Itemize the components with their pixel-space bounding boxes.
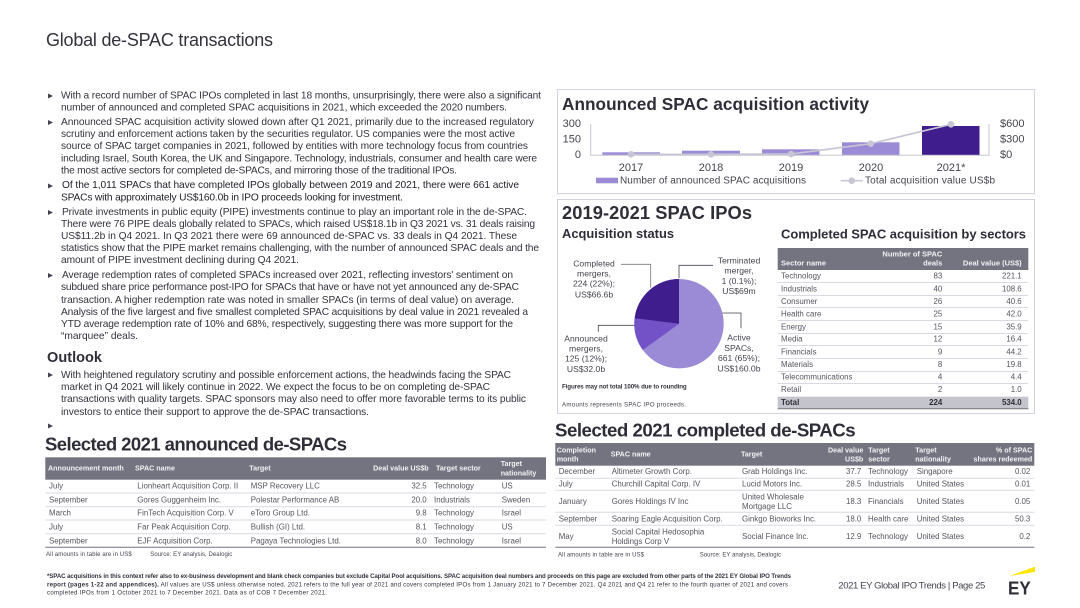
pie label: announced mergers: Announced — [564, 334, 608, 344]
table header: shares redeemed — [974, 456, 1032, 464]
table rows: 1.0 — [1011, 385, 1022, 394]
text block: key findings: US$11.2b in Q4 2021. In Q3 2021 there were 69 announced de-SPAC vs. 33 deals in Q4 2021. These — [61, 231, 517, 242]
text block: key findings: transaction. A higher redemption rate was noted in smaller SPACs (in terms of deal value) on average. — [61, 295, 514, 306]
table rows: Technology — [434, 509, 474, 518]
table rows: Israel — [502, 536, 521, 545]
table total row: Total — [781, 398, 799, 407]
pie chart: acquisition status — [634, 279, 724, 368]
table header: nationality — [501, 470, 536, 478]
footnote: completed IPOs from 1 October 2021 to 7 December 2021. Data as of COB 7 December 2021. — [47, 590, 327, 596]
table rows: Holdings Corp V — [612, 537, 670, 546]
table rows: 25 — [934, 310, 943, 319]
table rows: EJF Acquisition Corp. — [137, 536, 213, 545]
text block: key findings: Announced SPAC acquisition activity slowed down after Q1 2021, primarily due to the increased regulatory — [61, 117, 535, 128]
left axis labels: 300 — [563, 118, 581, 130]
table header: % of SPAC — [996, 446, 1032, 454]
table rows: Gores Holdings IV Inc — [612, 497, 689, 506]
table rows: Gores Guggenheim Inc. — [137, 495, 221, 504]
left axis labels: 0 — [575, 149, 581, 161]
table rows: January — [559, 497, 587, 506]
right axis labels: $600 — [1000, 118, 1024, 130]
table rows: 8 — [938, 360, 943, 369]
table rows: 108.6 — [1002, 284, 1022, 293]
footnote: report (pages 1-22 and appendices). All values are US$ unless otherwise noted. 2021 refers to the full year of 2021 and covers completed IPOs from 1 January 2021 to 7 December 2021. Q4 2021 and Q4 21 refer to the fourth quarter of 2021 and covers — [47, 581, 788, 588]
legend: Number of announced SPAC acquisitions — [620, 176, 806, 186]
table rows: Health care — [781, 310, 822, 319]
heading: Outlook: Outlook — [47, 350, 103, 366]
table header: US$b — [845, 456, 864, 464]
panel: 2019-2021 SPAC IPOs — [558, 200, 1034, 414]
page footer: 2021 EY Global IPO Trends | Page 25 — [838, 580, 985, 591]
text block: key findings: YTD average redemption rate of 10% and 68%, respectively, suggesting there was more support for the — [61, 319, 513, 330]
pie label: active SPACs: 661 (65%); — [718, 353, 760, 363]
table rows: 4 — [938, 372, 943, 381]
table header: Target sector — [436, 465, 481, 473]
table rows: 19.8 — [1006, 360, 1022, 369]
table header: Deal value US$b — [373, 465, 429, 473]
heading: completed de-SPACs: Selected 2021 completed de-SPACs — [555, 420, 856, 441]
table rows: Ginkgo Bioworks Inc. — [742, 515, 816, 524]
table header: SPAC name — [611, 451, 651, 459]
text block: outlook: transactions with quality targets. SPAC sponsors may also need to offer more favorable terms to its public — [61, 394, 526, 405]
table rows: 44.2 — [1006, 347, 1022, 356]
pie label: terminated merger: 1 (0.1%); — [722, 276, 756, 286]
table rows — [555, 467, 1034, 547]
text block: key findings: Average redemption rates of completed SPACs increased over 2021, reflecting investors' sentiment on — [62, 270, 513, 281]
pie label: completed mergers: US$66.6b — [575, 289, 613, 299]
pie label: active SPACs: SPACs, — [724, 343, 754, 353]
table header — [778, 248, 1028, 270]
table rows: July — [49, 481, 63, 490]
table rows: Media — [781, 335, 803, 344]
table rows: Technology — [434, 481, 474, 490]
table rows: 0.05 — [1015, 497, 1031, 506]
heading: announced de-SPACs: Selected 2021 announced de-SPACs — [45, 434, 347, 455]
text block: key findings: Private investments in public equity (PIPE) investments continue to play an important role in the de-SPAC. — [62, 207, 527, 218]
table rows: Israel — [502, 509, 521, 518]
table rows: Churchill Capital Corp. IV — [612, 480, 701, 489]
text block: key findings: Analysis of the five largest and five smallest completed SPAC acquisitions by deal value in 2021 revealed a — [61, 307, 528, 318]
table rows: Pagaya Technologies Ltd. — [251, 536, 341, 545]
category labels: 2021* — [937, 162, 966, 174]
table header: Target — [868, 446, 890, 454]
table rows: 2 — [938, 385, 942, 394]
table rows: 18.3 — [846, 497, 862, 506]
table rows: December — [559, 467, 595, 476]
table rows: 50.3 — [1015, 515, 1031, 524]
table rows: Technology — [868, 467, 908, 476]
table rows: 8.0 — [416, 536, 427, 545]
table rows: Industrials — [434, 495, 470, 504]
pie label: completed mergers — [573, 259, 615, 299]
table rows: Social Capital Hedosophia — [612, 527, 705, 536]
text block: key findings — [48, 90, 541, 342]
heading: announced SPAC acquisition activity: Announced SPAC acquisition activity — [562, 94, 869, 114]
text block: key findings: amount of PIPE investment declining during Q4 2021. — [61, 255, 299, 266]
table rows: Technology — [781, 272, 821, 281]
table rows: FinTech Acquisition Corp. V — [137, 509, 235, 518]
table total row: 534.0 — [1002, 398, 1022, 407]
pie label: announced mergers — [564, 334, 608, 374]
table rows: Far Peak Acquisition Corp. — [137, 522, 231, 531]
table rows: Lucid Motors Inc. — [742, 480, 802, 489]
table rows: Bullish (GI) Ltd. — [251, 522, 305, 531]
table rows: eToro Group Ltd. — [251, 509, 310, 518]
table header: Number of SPAC — [882, 250, 943, 259]
pie label: terminated merger — [718, 256, 760, 296]
table rows: 28.5 — [846, 480, 862, 489]
table notes: All amounts in table are in US$ — [558, 553, 645, 559]
table rows: Soaring Eagle Acquisition Corp. — [612, 515, 723, 524]
table rows: Polestar Performance AB — [251, 495, 339, 504]
table rows: 4.4 — [1011, 372, 1022, 381]
table rows: May — [559, 532, 574, 541]
subheading: acquisition status: Acquisition status — [562, 226, 674, 241]
pie label: active SPACs: Active — [727, 333, 751, 343]
table rows: July — [49, 522, 63, 531]
table rows: United States — [917, 515, 964, 524]
left axis labels: 150 — [563, 134, 581, 146]
table rows: 9.8 — [416, 509, 427, 518]
table: selected 2021 announced de-SPACs — [45, 434, 546, 558]
table notes — [558, 553, 781, 559]
table rows: 0.2 — [1019, 532, 1030, 541]
table rows: Financials — [868, 497, 904, 506]
text block: key findings: number of announced and completed SPAC acquisitions in 2021, which exceeded the 2020 numbers. — [61, 102, 507, 114]
table rows: 37.7 — [846, 467, 861, 476]
footnote — [47, 573, 792, 596]
table header: nationality — [915, 456, 951, 464]
table rows: 20.0 — [411, 495, 427, 504]
text block: key findings: With a record number of SPAC IPOs completed in last 18 months, unsurprisingly, there were also a significant — [61, 90, 541, 102]
table header: sector — [868, 456, 890, 464]
text block: key findings: There were 76 PIPE deals globally related to SPACs, which raised US$18.1b in Q3 2021 vs. 31 deals raising — [61, 219, 535, 230]
text block: outlook — [48, 370, 526, 428]
text block: key findings: “marquee” deals. — [61, 331, 138, 342]
text block: key findings: statistics show that the PIPE market remains challenging, with the number of announced SPAC deals and the — [61, 243, 539, 254]
table rows — [778, 272, 1028, 394]
title: Global de-SPAC transactions — [46, 30, 273, 50]
table notes: Source: EY analysis, Dealogic — [150, 552, 232, 558]
pie label: terminated merger: US$69m — [722, 286, 756, 296]
table rows: Technology — [434, 536, 474, 545]
table total row: 224 — [929, 398, 943, 407]
pie label: terminated merger: Terminated — [718, 256, 760, 266]
table rows: 16.4 — [1006, 335, 1022, 344]
table rows: US — [502, 522, 513, 531]
table rows: Lionheart Acquisition Corp. II — [137, 481, 238, 490]
table rows: Sweden — [502, 495, 530, 504]
pie label: completed mergers: mergers, — [577, 269, 611, 279]
table rows: 40.6 — [1006, 297, 1022, 306]
right axis labels: $300 — [1000, 134, 1024, 146]
table rows: United Wholesale — [742, 493, 804, 502]
pie label: terminated merger: merger, — [724, 266, 754, 276]
table rows: July — [559, 480, 573, 489]
table rows: Energy — [781, 322, 806, 331]
heading: sectors table: Completed SPAC acquisition by sectors — [781, 226, 1026, 241]
table header: Sector name — [781, 259, 826, 268]
table: selected 2021 completed de-SPACs — [555, 420, 1034, 559]
note: amounts: Amounts represents SPAC IPO proceeds. — [562, 402, 686, 409]
table rows: 15 — [934, 322, 943, 331]
legend — [596, 176, 995, 186]
table header: Target — [249, 465, 271, 473]
table rows: US — [502, 481, 513, 490]
table notes — [46, 552, 232, 558]
table rows: Grab Holdings Inc. — [742, 467, 807, 476]
table rows: Technology — [868, 532, 908, 541]
line chart: total acquisition value — [628, 121, 954, 158]
table header — [45, 457, 546, 480]
bar chart: number of acquisitions — [591, 124, 989, 155]
pie leader lines — [598, 264, 741, 332]
table rows: 0.02 — [1015, 467, 1030, 476]
text block: key findings: Of the 1,011 SPACs that have completed IPOs globally between 2019 and 2021, there were 661 active — [62, 180, 519, 191]
text block: outlook: market in Q4 2021 will likely continue in 2022. We expect the focus to be on completing de-SPAC — [61, 382, 490, 393]
table rows: September — [559, 515, 598, 524]
table rows: United States — [917, 497, 964, 506]
table header: Deal value — [828, 446, 863, 454]
table rows: Technology — [434, 522, 474, 531]
legend: Total acquisition value US$b — [865, 176, 995, 186]
footnote: *SPAC acquisitions in this context refer also to ex-business development and blank check companies but exclude Capital Pool acquisitions. SPAC acquisition deal numbers and proceeds on this page are excluded from other parts of the 2021 EY Global IPO Trends — [47, 573, 792, 580]
pie label: completed mergers: 224 (22%); — [573, 279, 615, 289]
table rows: 26 — [934, 297, 943, 306]
left axis labels — [563, 118, 581, 161]
table rows: Industrials — [868, 480, 904, 489]
table rows: Singapore — [917, 467, 953, 476]
table rows: Altimeter Growth Corp. — [612, 467, 692, 476]
panel: announced SPAC acquisition activity — [558, 90, 1034, 194]
text block: key findings: the most active sectors for completed de-SPACs, and mirroring those of the traditional IPOs. — [61, 166, 457, 176]
text block: key findings: subdued share price performance post-IPO for SPACs that have or have not yet announced any de-SPAC — [61, 282, 519, 293]
table rows: 35.9 — [1006, 322, 1022, 331]
pie label: completed mergers: Completed — [573, 259, 615, 269]
table header: Completion — [557, 446, 596, 454]
table rows: MSP Recovery LLC — [251, 481, 320, 490]
table rows: 12.9 — [846, 532, 862, 541]
table notes: Source: EY analysis, Dealogic — [700, 553, 781, 559]
table header: Announcement month — [48, 465, 124, 473]
table header: Target — [741, 451, 763, 459]
table rows: Industrials — [781, 284, 817, 293]
table rows: 42.0 — [1006, 310, 1022, 319]
pie label: active SPACs: US$160.0b — [717, 364, 761, 374]
table rows: 12 — [934, 335, 942, 344]
table rows: Telecommunications — [781, 372, 853, 381]
table rows: 0.01 — [1015, 480, 1030, 489]
table header: month — [557, 456, 579, 464]
pie label: announced mergers: US$32.0b — [567, 364, 605, 374]
table rows: 9 — [938, 347, 943, 356]
table header: Target — [915, 446, 937, 454]
table rows: March — [49, 509, 71, 518]
text block: key findings: including Israel, South Korea, the UK and Singapore. Technology, industrials, consumer and health care were — [61, 154, 537, 164]
icon: EY logo: EY — [1008, 577, 1031, 598]
table header: deals — [923, 259, 942, 268]
text block: outlook: With heightened regulatory scrutiny and possible enforcement actions, the headwinds facing the SPAC — [61, 370, 511, 381]
text block: key findings: source of SPAC target companies in 2021, followed by entities with more technology focus from countries — [61, 141, 528, 152]
pie label: announced mergers: mergers, — [569, 344, 603, 354]
table rows: United States — [917, 480, 964, 489]
table rows: Retail — [781, 385, 801, 394]
table rows: Materials — [781, 360, 813, 369]
table rows: Financials — [781, 347, 817, 356]
category labels: 2017 — [619, 162, 643, 174]
text block: key findings: SPACs with approximately US$160.0b in IPO proceeds looking for investment. — [61, 192, 403, 204]
right axis labels — [1000, 118, 1024, 161]
table header: Target — [501, 460, 523, 468]
text block: outlook: investors to entice their support to approve the de-SPAC transactions. — [61, 407, 369, 418]
pie label: active SPACs — [717, 333, 761, 374]
note: rounding: Figures may not total 100% due to rounding — [562, 384, 687, 391]
table rows: United States — [917, 532, 964, 541]
category labels: 2019 — [779, 162, 803, 174]
table rows: 32.5 — [411, 481, 427, 490]
right axis labels: $0 — [1000, 149, 1012, 161]
pie label: announced mergers: 125 (12%); — [565, 354, 607, 364]
table rows: 8.1 — [416, 522, 427, 531]
table rows: Mortgage LLC — [742, 502, 792, 511]
table rows: 18.0 — [846, 515, 862, 524]
text block: key findings: scrutiny and enforcement actions taken by the securities regulator. US companies were the most active — [61, 129, 515, 140]
table rows: 83 — [934, 272, 943, 281]
icon: EY logo — [1008, 567, 1035, 598]
table header: SPAC name — [135, 465, 175, 473]
table rows: Consumer — [781, 297, 818, 306]
category labels: 2020 — [859, 162, 883, 174]
table notes: All amounts in table are in US$ — [46, 552, 132, 558]
table header — [555, 443, 1034, 466]
table rows: 221.1 — [1002, 272, 1022, 281]
table rows: September — [49, 536, 88, 545]
table total row — [778, 397, 1028, 409]
heading: 2019-2021 SPAC IPOs: 2019-2021 SPAC IPOs — [562, 202, 752, 223]
table rows: 40 — [934, 284, 943, 293]
category labels: 2018 — [699, 162, 723, 174]
category labels — [619, 162, 966, 174]
table header: Deal value (US$) — [963, 259, 1022, 268]
table rows: Health care — [868, 515, 909, 524]
table rows — [45, 481, 546, 547]
table rows: September — [49, 495, 88, 504]
table rows: Social Finance Inc. — [742, 532, 809, 541]
table: completed SPAC acquisition by sectors — [778, 226, 1028, 409]
